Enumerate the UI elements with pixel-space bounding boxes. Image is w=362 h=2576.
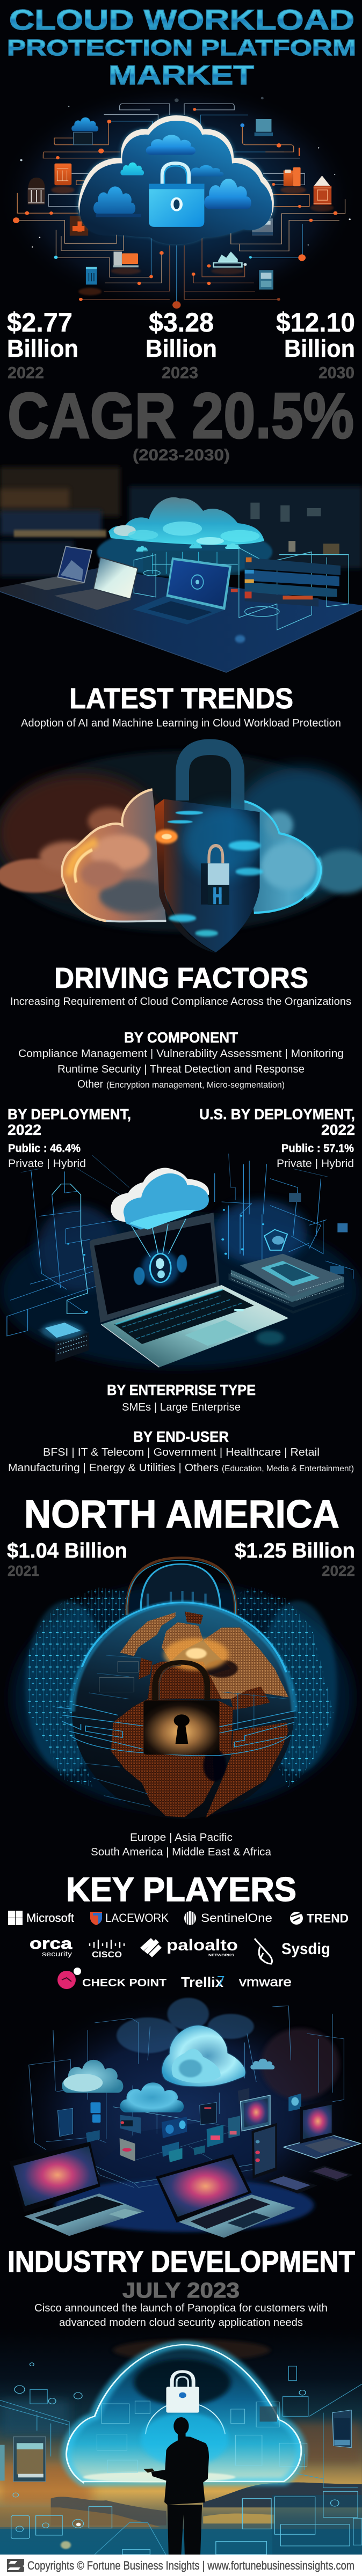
screen left: [0, 2437, 46, 2482]
screen emblem: [132, 1219, 187, 1286]
small chip: [37, 1321, 89, 1362]
logo: Lacework: LACEWORK: [105, 1911, 169, 1925]
logo: VMware: vmware: [239, 1975, 292, 1990]
segment: by enterprise type: BY ENTERPRISE TYPE: [107, 1382, 256, 1398]
other regions: [91, 1832, 272, 1858]
device: tablet: [241, 2095, 270, 2131]
lower cloud: [120, 2082, 184, 2112]
segment: by component: Compliance Management | Vulnerability Assessment | Monitoring: [18, 1048, 344, 1060]
segment: U.S. by deployment: Private | Hybrid: [277, 1158, 354, 1170]
segment: by end-user: Manufacturing | Energy & Utilities | Others: [8, 1462, 219, 1474]
logo: SentinelOne: SentinelOne: [201, 1911, 272, 1925]
table surface: [0, 568, 362, 672]
screen right: [332, 2410, 351, 2448]
building icons: [28, 118, 334, 295]
illustration: connected devices under clouds: [0, 1992, 362, 2238]
segment: U.S. by deployment: U.S. BY DEPLOYMENT,: [199, 1106, 355, 1122]
segment: by end-user: (Education, Media & Entertainment): [222, 1464, 354, 1473]
logo: Palo Alto Networks: [140, 1936, 238, 1957]
title: CLOUD WORKLOAD: [9, 4, 354, 36]
small padlock: [201, 846, 229, 905]
globe: [72, 1603, 294, 1819]
heading: latest trends: LATEST TRENDS: [69, 682, 293, 715]
logo: Check Point: CHECK POINT: [82, 1977, 166, 1989]
logo: Trellix: Trellix: [181, 1974, 224, 1990]
segment: by end-user: BY END-USER: [133, 1428, 229, 1445]
platform: [95, 2121, 254, 2183]
icon: Fortune Business Insights logo: [7, 2559, 24, 2572]
data columns: [25, 1587, 337, 1787]
illustration: laptops on table with holographic cloud: [0, 467, 362, 672]
device: right laptop: [284, 2100, 360, 2159]
illustration: cloud security network hero: [0, 82, 358, 312]
logo: Orca Security: security: [42, 1950, 73, 1958]
company logos: [8, 1911, 349, 1990]
device: left laptop: [9, 2142, 144, 2236]
segment: U.S. by deployment: Public : 57.1%: [281, 1142, 354, 1155]
logo: Orca Security: [30, 1935, 73, 1958]
logo: Cisco: CISCO: [92, 1950, 122, 1959]
heading: driving factors: DRIVING FACTORS: [54, 962, 308, 994]
stat: 2030 market size: 2030: [318, 363, 354, 382]
stat: north america 2021: [7, 1539, 127, 1579]
illustration: businessman viewing cloud padlock hologram: [0, 2329, 362, 2555]
segment: by end-user: [8, 1428, 354, 1474]
main cloud: [162, 2025, 245, 2086]
laptop: night sky: [21, 546, 92, 590]
stat: north america 2022: $1.25 Billion: [235, 1539, 355, 1562]
development description: advanced modern cloud security application needs: [59, 2317, 303, 2329]
segment: by component: Runtime Security | Threat Detection and Response: [57, 1063, 305, 1075]
stat: 2023 market size: [146, 307, 217, 382]
stat: north america 2022: [235, 1539, 355, 1579]
ghost clouds: [117, 1998, 254, 2053]
holographic cloud: [97, 497, 272, 576]
shield: [155, 799, 263, 953]
stat: north america 2021: $1.04 Billion: [7, 1539, 127, 1562]
chip stack: [223, 1254, 353, 1313]
wireframe lines: [29, 2006, 344, 2188]
cloud hologram: [67, 2345, 307, 2483]
small right cloud: [250, 2059, 274, 2069]
stat: 2022 market size: [7, 307, 78, 382]
segment: by component: [18, 1029, 344, 1090]
stat: 2023 market size: 2023: [162, 363, 198, 382]
title: PROTECTION PLATFORM: [7, 35, 356, 60]
segment: U.S. by deployment: 2022: [321, 1121, 355, 1138]
other regions: Europe | Asia Pacific: [130, 1832, 233, 1844]
padlock: [143, 1662, 219, 1755]
stat: 2023 market size: Billion: [146, 335, 217, 362]
stat: 2030 market size: [276, 307, 355, 382]
laptop: bright screen: [54, 557, 138, 610]
blue nodes and stars: [20, 97, 351, 266]
blue cloud: [240, 801, 362, 913]
device: centre laptop: [156, 2154, 295, 2238]
logo: Microsoft: [8, 1911, 74, 1925]
development description: Cisco announced the launch of Panoptica for customers with: [34, 2302, 328, 2314]
stat: 2022 market size: $2.77: [7, 307, 73, 337]
illustration: padlock on digital globe: [11, 1558, 353, 1819]
stat: north america 2021: 2021: [8, 1562, 39, 1579]
glowing chip and icons: [67, 1193, 347, 1313]
segment: by deployment: [8, 1106, 131, 1170]
hills: [0, 2482, 362, 2555]
segment: by component: Other: [77, 1078, 103, 1090]
laptop: blue screen: [133, 557, 231, 625]
segment: by deployment: 2022: [8, 1121, 41, 1138]
stat: 2022 market size: 2022: [8, 363, 44, 382]
illustration: laptop under cloud with circuit lines: [0, 1154, 360, 1368]
laptop: [90, 1213, 288, 1367]
orange cloud: [0, 789, 169, 921]
stat: 2022 market size: Billion: [7, 335, 78, 362]
segment: by deployment: Public : 46.4%: [8, 1142, 81, 1155]
circuit lines: [14, 104, 345, 304]
floating cloud: [111, 1168, 209, 1230]
heading: latest trends: Adoption of AI and Machine Learning in Cloud Workload Protection: [21, 717, 341, 729]
big shackle: [183, 747, 238, 811]
logo: Check Point: [57, 1968, 166, 1989]
stat: 2030 market size: Billion: [284, 335, 355, 362]
device: flat phones: [264, 2166, 353, 2193]
heading: driving factors: Increasing Requirement of Cloud Compliance Across the Organizations: [10, 996, 351, 1008]
businessman silhouette: [143, 2417, 209, 2555]
development description: [34, 2302, 328, 2329]
title: MARKET: [108, 60, 254, 90]
device: phone: [251, 2123, 277, 2179]
segment: by component: (Encryption management, Micro-segmentation): [106, 1081, 285, 1090]
padlock: [149, 163, 204, 227]
logo: Palo Alto Networks: paloalto: [166, 1936, 238, 1954]
heading: north america: NORTH AMERICA: [24, 1493, 339, 1536]
logo: Palo Alto Networks: NETWORKS: [208, 1954, 234, 1957]
logo: Sysdig: Sysdig: [281, 1940, 330, 1958]
stat: 2023 market size: $3.28: [149, 307, 214, 337]
stat: north america 2022: 2022: [322, 1562, 355, 1579]
date: JULY 2023: [122, 2279, 240, 2302]
illustration: shield padlock between orange and blue clouds: [0, 747, 362, 953]
heading: driving factors: [10, 962, 351, 1008]
central cloud: [78, 115, 274, 244]
other regions: South America | Middle East & Africa: [91, 1846, 272, 1858]
CAGR figure: (2023-2030): [133, 446, 230, 464]
segment: by component: BY COMPONENT: [124, 1029, 238, 1046]
segment: by enterprise type: SMEs | Large Enterprise: [122, 1401, 241, 1413]
large shackle: [127, 1558, 235, 1615]
footer bar: [0, 2555, 362, 2576]
segment: by deployment: BY DEPLOYMENT,: [8, 1106, 131, 1122]
segment: U.S. by deployment: [199, 1106, 355, 1170]
ring data bands: [56, 1705, 295, 1756]
circuit lines: [7, 1154, 353, 1336]
logo: Sysdig: [255, 1939, 330, 1964]
left cloud: [62, 2060, 123, 2093]
logo: Microsoft: Microsoft: [26, 1911, 74, 1925]
heading: key players: KEY PLAYERS: [66, 1871, 296, 1909]
segment: by deployment: Private | Hybrid: [8, 1158, 86, 1170]
logo: Orca Security: orca: [30, 1935, 72, 1953]
logo: Trend Micro: TREND: [307, 1911, 349, 1925]
floating app cards: [57, 2088, 301, 2162]
holographic data panels: [134, 548, 349, 630]
segment: by end-user: BFSI | IT & Telecom | Government | Healthcare | Retail: [43, 1447, 320, 1458]
segment: by enterprise type: [107, 1382, 256, 1413]
title: [7, 4, 356, 90]
logo: Cisco: [90, 1940, 124, 1959]
stat: 2030 market size: $12.10: [276, 307, 355, 337]
white padlock: [166, 2372, 199, 2413]
background screens: [0, 2363, 362, 2555]
orange nodes: [13, 108, 337, 309]
heading: latest trends: [21, 682, 341, 729]
